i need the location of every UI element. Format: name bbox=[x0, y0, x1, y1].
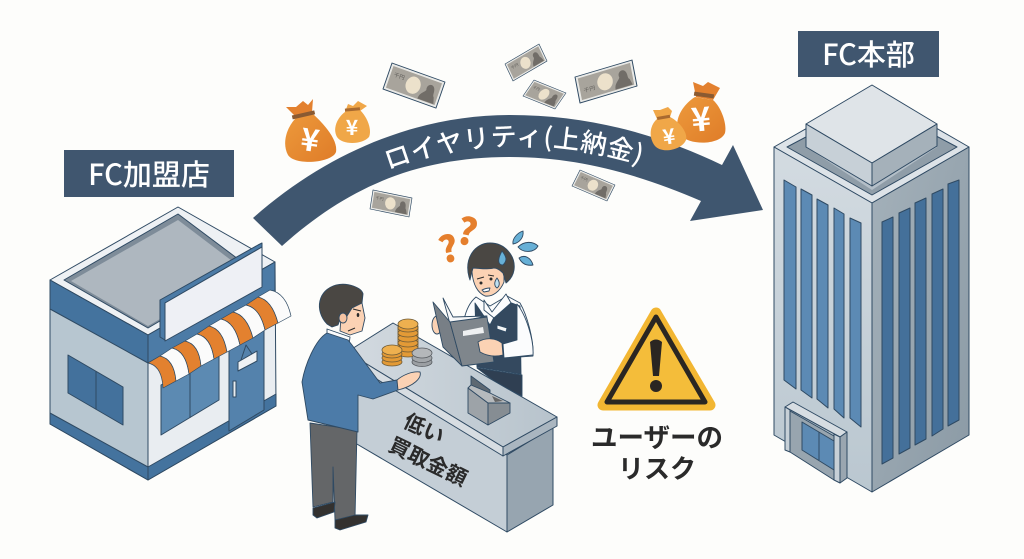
banknote 3 bbox=[523, 80, 566, 109]
shop front window bbox=[161, 352, 219, 435]
customer hair bbox=[319, 284, 363, 327]
sweat drops bbox=[513, 231, 538, 265]
right facade windows bbox=[882, 180, 959, 464]
coin stacks bbox=[382, 319, 432, 366]
shop door bbox=[229, 330, 264, 431]
shop side window bbox=[68, 355, 123, 425]
small bag: ¥ bbox=[661, 120, 678, 152]
tall gold stack bbox=[398, 319, 418, 357]
money bags left bbox=[285, 99, 370, 162]
clerk expression bbox=[477, 275, 494, 292]
banknote 6: 千円 bbox=[375, 195, 384, 203]
label: FC本部 bbox=[798, 31, 939, 77]
silver stack bbox=[412, 348, 432, 366]
banknote 2: 千円 bbox=[510, 62, 520, 71]
banknote 5 bbox=[572, 170, 615, 201]
banknote 1: 千円 bbox=[393, 71, 406, 82]
label: FC加盟店 bbox=[64, 150, 234, 197]
banknote 1 bbox=[383, 63, 445, 108]
customer bbox=[302, 284, 420, 530]
counter text: 買取金額: 買取金額 bbox=[384, 429, 473, 493]
money bags right bbox=[651, 82, 725, 152]
cash register bbox=[468, 376, 510, 425]
small bag: ¥ bbox=[346, 112, 359, 142]
counter bbox=[347, 323, 557, 532]
counter text: 低い: 低い bbox=[399, 405, 450, 451]
banknote 4: 千円 bbox=[583, 83, 596, 94]
customer hand bbox=[397, 372, 420, 390]
customer shoes bbox=[313, 502, 368, 530]
customer face bbox=[340, 298, 365, 335]
clerk hair bbox=[468, 243, 514, 283]
rooftop block bbox=[806, 85, 937, 186]
large bag: ¥ bbox=[689, 92, 713, 142]
question marks bbox=[433, 201, 483, 275]
clerk bbox=[433, 201, 538, 396]
customer expression bbox=[348, 309, 361, 331]
label: FC加盟店: FC加盟店 bbox=[88, 152, 210, 194]
tower entrance bbox=[785, 402, 847, 483]
banknote 4 bbox=[575, 60, 637, 103]
large bag: ¥ bbox=[298, 114, 323, 161]
headquarters tower bbox=[774, 85, 969, 492]
banknote 3: 千円 bbox=[531, 85, 541, 93]
label: FC本部: FC本部 bbox=[822, 32, 915, 74]
banknote 2 bbox=[505, 44, 547, 81]
striped awning bbox=[148, 290, 291, 388]
clerk shirt bbox=[464, 296, 533, 358]
sweat on cheek bbox=[495, 278, 499, 288]
sweat on head bbox=[499, 251, 506, 265]
clerk trousers bbox=[477, 368, 522, 396]
name tag bbox=[497, 325, 507, 332]
clerk right sleeve bbox=[503, 304, 533, 358]
banknote 6 bbox=[370, 190, 412, 217]
customer collar bbox=[327, 329, 350, 345]
arrow label: ロイヤリティ(上納金) bbox=[386, 125, 642, 169]
clerk vest bbox=[475, 300, 521, 374]
clerk collar bbox=[484, 294, 511, 318]
user risk text: ユーザーの bbox=[591, 416, 723, 455]
left facade windows bbox=[784, 180, 861, 427]
clerk book bbox=[432, 298, 503, 366]
shop sign board bbox=[160, 243, 262, 341]
customer ear bbox=[339, 313, 347, 323]
customer sweater bbox=[302, 333, 398, 432]
warning sign bbox=[603, 313, 710, 405]
user risk text bbox=[591, 416, 723, 486]
question marks: ? bbox=[433, 220, 464, 275]
customer trousers bbox=[310, 423, 357, 520]
royalty curved arrow bbox=[253, 115, 763, 246]
franchise store building bbox=[50, 207, 291, 480]
short gold stack bbox=[382, 345, 402, 366]
question marks: ? bbox=[452, 201, 483, 258]
user risk text: リスク bbox=[618, 449, 696, 486]
banknote 5: 千円 bbox=[579, 175, 589, 183]
clerk face bbox=[472, 266, 504, 296]
